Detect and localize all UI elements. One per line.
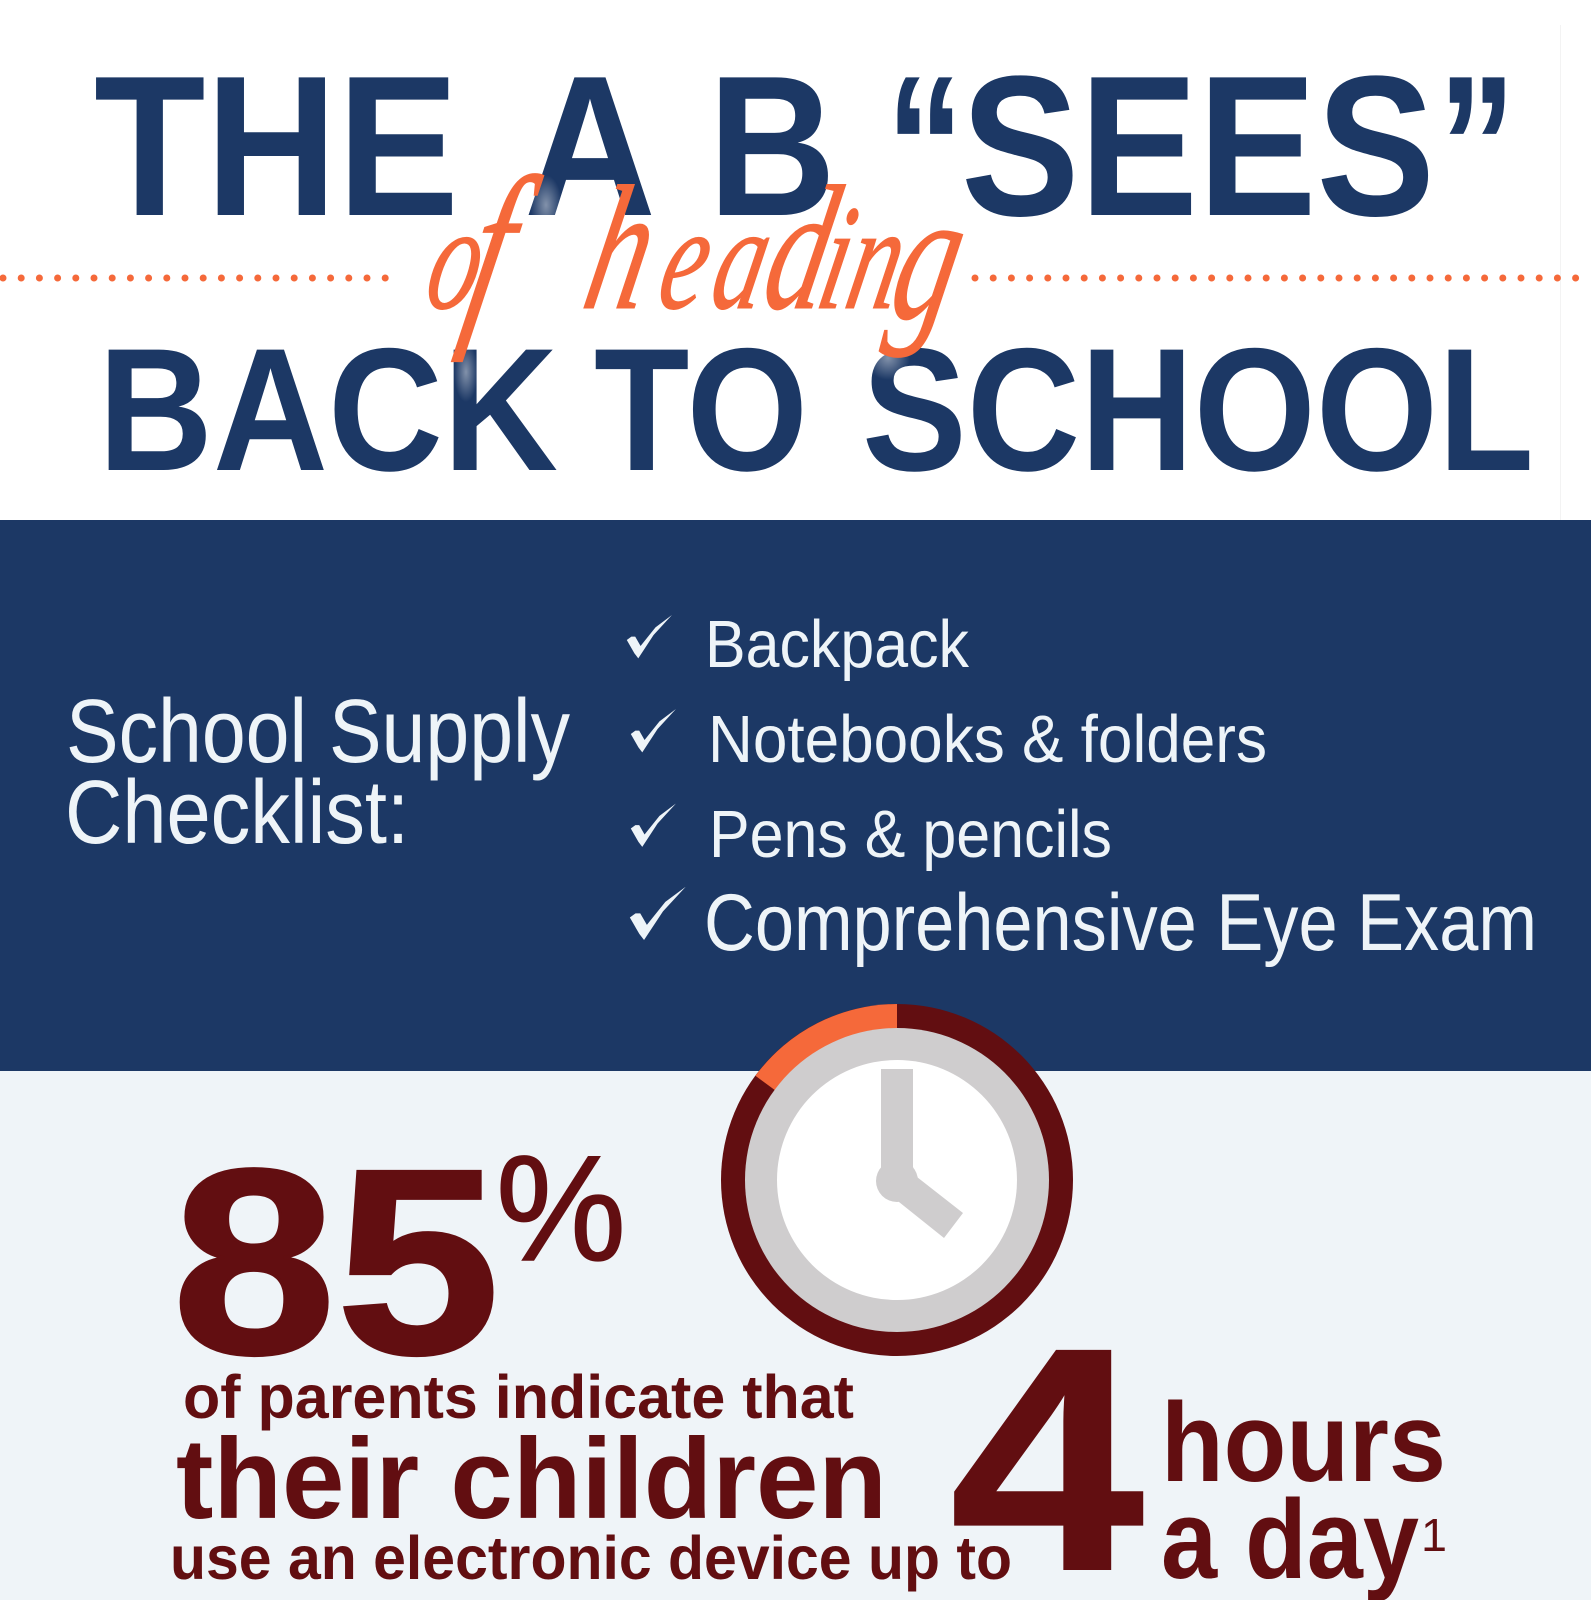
- script subtitle: of heading: n: [835, 176, 921, 341]
- text: a day: a day: [1161, 1477, 1419, 1600]
- dotted divider left: [3, 274, 392, 282]
- script subtitle: of heading: o: [415, 176, 501, 341]
- title line 2: BACK: [98, 313, 558, 508]
- title line 1: B: [708, 35, 836, 258]
- footnote marker: 1: 1: [1421, 1509, 1447, 1561]
- title line 1: SEES: [961, 35, 1435, 258]
- title line 2: [98, 313, 1534, 508]
- script subtitle: of heading: d: [751, 150, 854, 347]
- statistic: 85 percent: 85: [172, 1114, 500, 1409]
- title line 1: A: [524, 35, 656, 258]
- checklist heading: Checklist:: [65, 763, 409, 863]
- checklist items: Pens & pencils: [709, 797, 1112, 872]
- checklist items: Backpack: [705, 607, 969, 682]
- script subtitle: of heading: h: [571, 150, 673, 347]
- title line 1: “: [886, 35, 964, 258]
- panel: school supply checklist: [0, 520, 1591, 1071]
- statistic: 85 percent: %: [496, 1124, 626, 1292]
- checklist items: [704, 607, 1537, 968]
- script subtitle: of heading: e: [647, 176, 728, 341]
- dotted divider right: [975, 274, 1591, 282]
- script subtitle: of heading: i: [806, 176, 870, 341]
- script subtitle: of heading: f: [449, 136, 552, 363]
- icon: clock: [721, 1004, 1073, 1356]
- checklist heading: School Supply: [66, 682, 570, 782]
- text: use an electronic device up to: use an electronic device up to: [170, 1524, 1012, 1592]
- title line 2: SCHOOL: [862, 313, 1534, 508]
- script subtitle: of heading: g: [877, 153, 984, 358]
- checklist heading: [65, 682, 570, 863]
- text: hours: hours: [1161, 1380, 1446, 1505]
- title line 1: THE: [94, 35, 459, 258]
- text: of parents indicate that: of parents indicate that: [183, 1363, 854, 1431]
- text: their children: their children: [176, 1416, 887, 1543]
- statistic: 85 percent: [172, 1114, 626, 1409]
- checklist items: Notebooks & folders: [708, 702, 1267, 777]
- panel: statistics background: [0, 1071, 1591, 1600]
- script subtitle: of heading: [410, 136, 988, 363]
- title line 1: ”: [1438, 35, 1516, 258]
- script subtitle: of heading: a: [700, 176, 786, 341]
- icons: check marks: [627, 615, 686, 940]
- title line 2: TO: [594, 313, 808, 508]
- title line 1: [94, 35, 1516, 258]
